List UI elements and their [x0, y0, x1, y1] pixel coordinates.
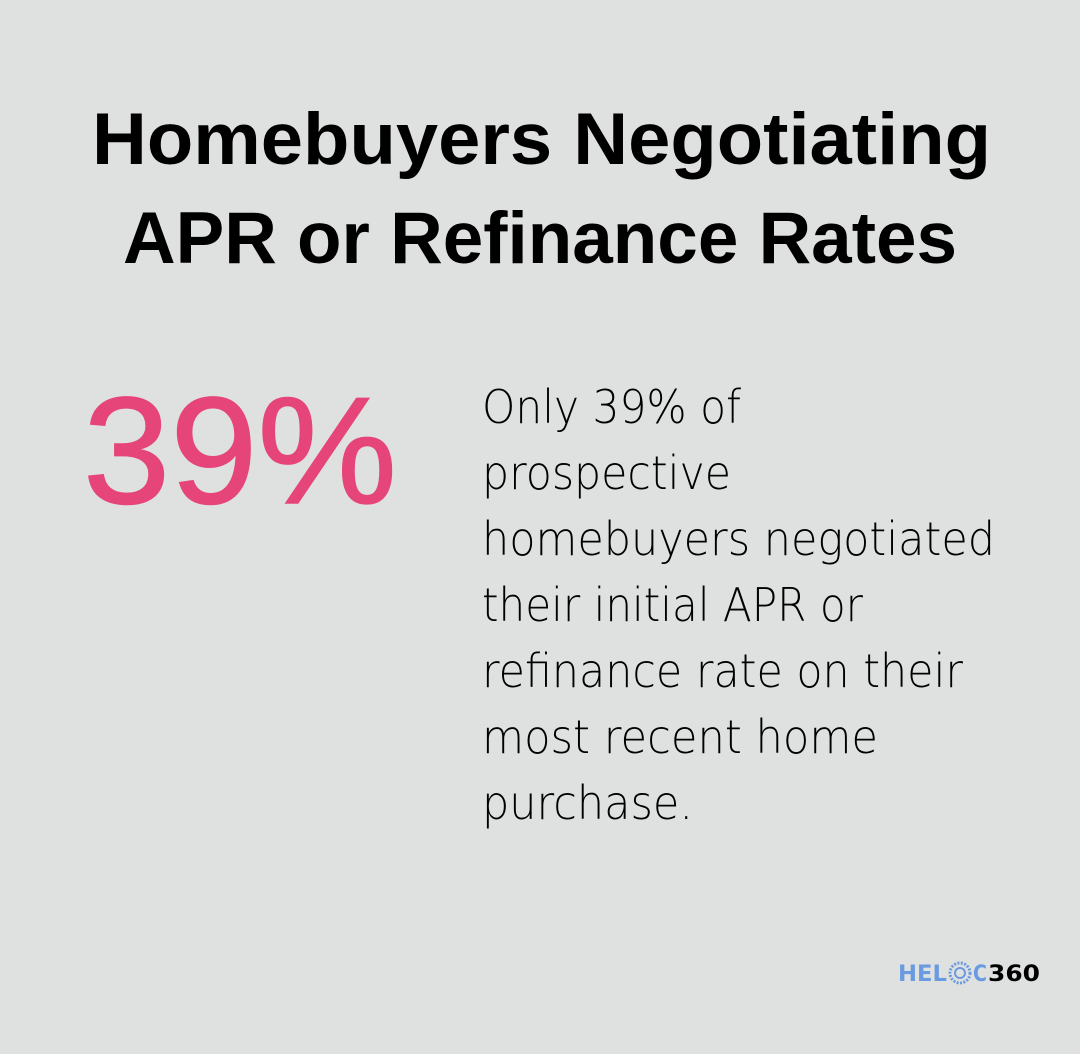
logo: HELOC360: HEL — [898, 962, 947, 987]
logo: HELOC360: 360 — [988, 962, 1040, 987]
logo: HELOC360: C — [973, 962, 987, 987]
description text — [482, 380, 995, 830]
description text: prospective — [482, 446, 731, 500]
big statistic: 39%: 39% — [83, 366, 397, 536]
description text: refinance rate on their — [482, 644, 963, 698]
title: APR or Refinance Rates — [123, 198, 957, 279]
icon: logo swirl — [950, 963, 970, 983]
description text: Only 39% of — [482, 380, 742, 434]
title: Homebuyers Negotiating — [92, 99, 991, 180]
description text: their initial APR or — [482, 578, 863, 632]
description text: homebuyers negotiated — [482, 512, 995, 566]
description text: purchase. — [482, 776, 693, 830]
title — [92, 99, 991, 279]
description text: most recent home — [482, 710, 878, 764]
logo: HELOC360 — [898, 962, 1040, 987]
